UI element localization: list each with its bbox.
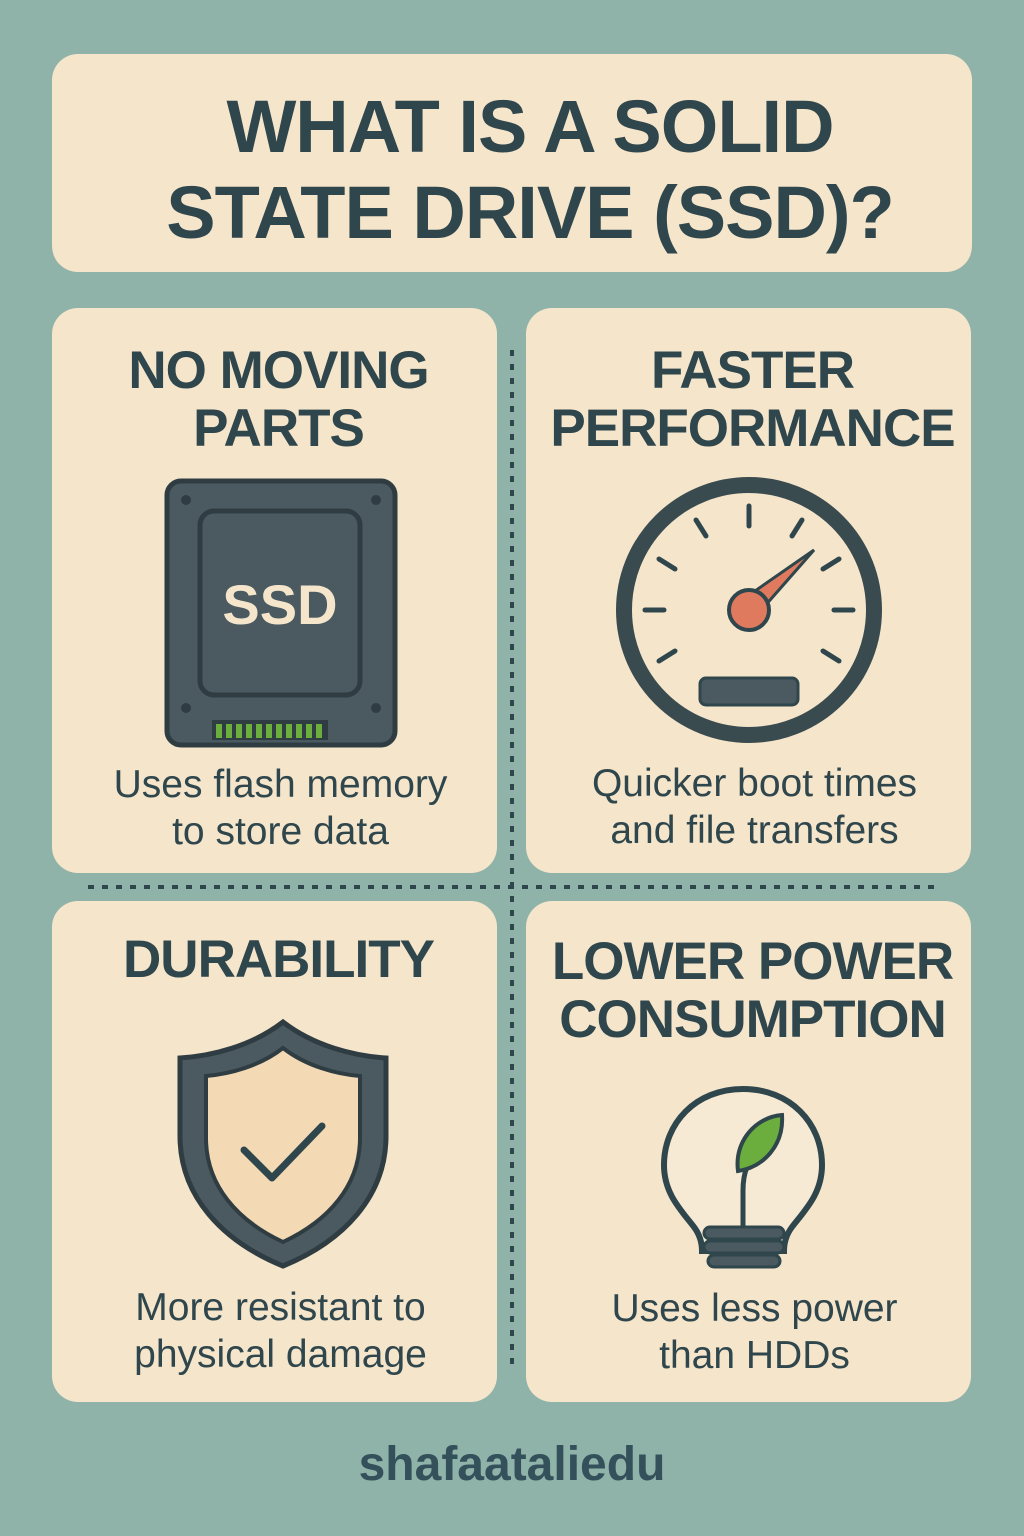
text: to store data xyxy=(172,810,389,853)
title panel xyxy=(52,54,972,272)
footer credit: shafaataliedu xyxy=(359,1438,665,1491)
icon: bulb with leaf xyxy=(661,1086,825,1268)
heading: FASTER xyxy=(651,341,854,400)
heading xyxy=(552,932,953,1049)
heading: PERFORMANCE xyxy=(550,399,955,458)
text xyxy=(134,1286,427,1376)
panel: lower power xyxy=(526,901,971,1402)
heading xyxy=(128,341,429,458)
text: than HDDs xyxy=(659,1334,850,1377)
text: physical damage xyxy=(134,1333,427,1376)
text: Quicker boot times xyxy=(592,762,917,805)
title xyxy=(166,85,894,254)
heading: LOWER POWER xyxy=(552,932,953,991)
panel: durability xyxy=(52,901,497,1402)
heading: DURABILITY xyxy=(123,930,434,989)
heading: CONSUMPTION xyxy=(559,990,946,1049)
panel: no moving parts xyxy=(52,308,497,873)
title: WHAT IS A SOLID xyxy=(226,85,834,168)
heading: NO MOVING xyxy=(128,341,429,400)
text: Uses flash memory xyxy=(114,763,447,806)
text: More resistant to xyxy=(135,1286,426,1329)
heading xyxy=(550,341,955,458)
text xyxy=(114,763,448,853)
icon: ssd xyxy=(164,478,398,748)
text xyxy=(611,1287,898,1377)
text: Uses less power xyxy=(611,1287,898,1330)
text xyxy=(592,762,917,852)
text: and file transfers xyxy=(610,809,899,852)
icon: ssd: SSD xyxy=(222,573,338,636)
panel: faster performance xyxy=(526,308,971,873)
heading: PARTS xyxy=(193,399,364,458)
title: STATE DRIVE (SSD)? xyxy=(166,171,894,254)
icon: gauge xyxy=(616,477,882,743)
icon: shield xyxy=(178,1019,388,1269)
